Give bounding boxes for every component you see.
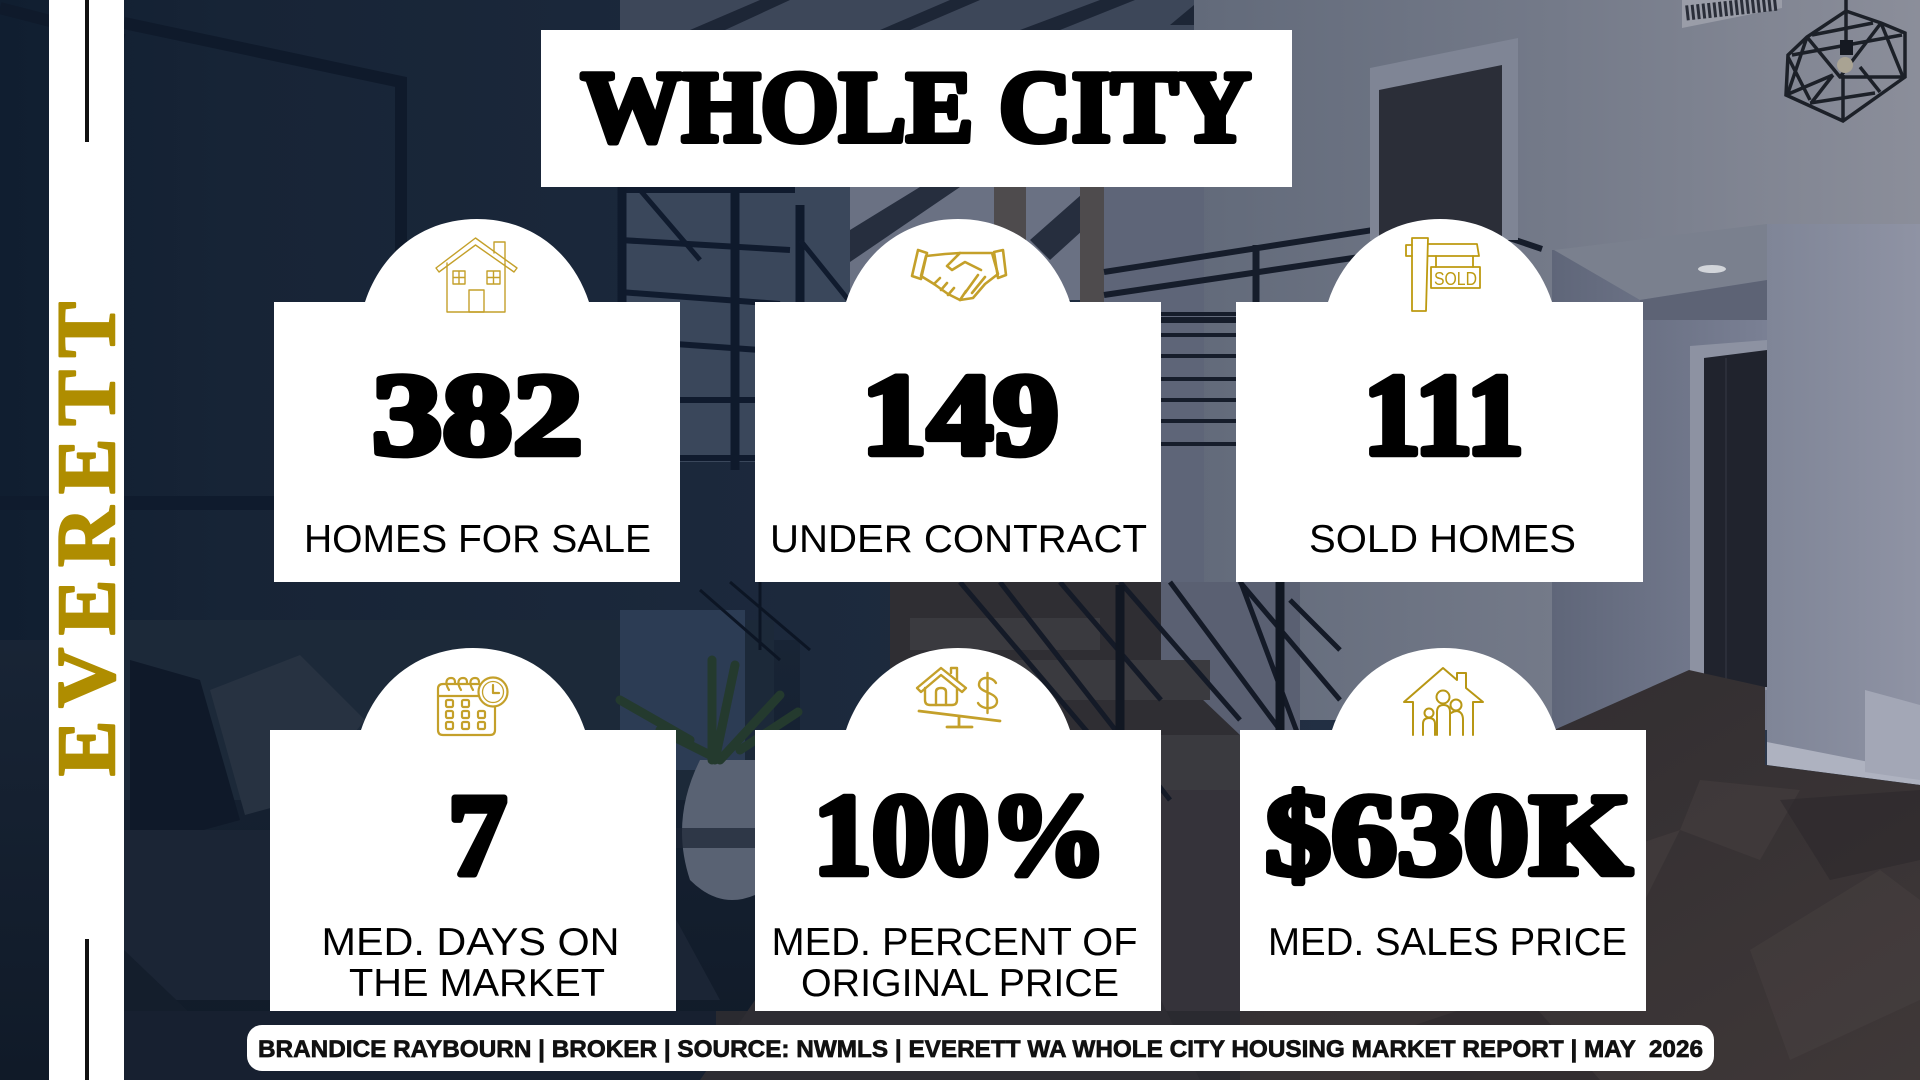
icon: house dollar scale <box>917 668 1000 727</box>
number: 100% <box>813 771 1107 900</box>
floor <box>1240 670 1920 1080</box>
icon: family in house <box>1404 668 1483 735</box>
right column wall <box>1767 224 1920 764</box>
label: MED. DAYS ON <box>322 921 620 964</box>
icon: house <box>436 238 517 312</box>
number: 382 <box>372 351 583 480</box>
card: under contract <box>755 219 1161 582</box>
label: MED. PERCENT OF <box>772 921 1138 964</box>
sidebar city name: EVERETT <box>40 302 132 776</box>
card: sold homes <box>1236 219 1643 582</box>
label: SOLD HOMES <box>1309 518 1576 561</box>
sidebar bottom rule <box>85 939 89 1080</box>
title: WHOLE CITY <box>581 51 1251 164</box>
icon text: SOLD <box>1434 269 1477 289</box>
footer credit bar: BRANDICE RAYBOURN | BROKER | SOURCE: NWMLS | EVERETT WA WHOLE CITY HOUSING MARKET REPORT | MAY 2026 <box>258 1036 1703 1063</box>
label second line: THE MARKET <box>349 962 605 1005</box>
number: $630K <box>1265 771 1632 900</box>
pendant lamp <box>1786 0 1905 121</box>
soffit and hall <box>1552 250 1767 730</box>
left sidebar <box>40 0 132 1080</box>
number: 111 <box>1363 351 1524 480</box>
icon: sold sign <box>1406 238 1480 311</box>
vent <box>1682 0 1782 28</box>
footer credit bar <box>247 1025 1714 1071</box>
card: median sales price <box>1240 648 1646 1011</box>
card: median percent of original price <box>755 648 1161 1011</box>
upper door <box>1370 38 1518 240</box>
ceiling & beams <box>620 0 1194 187</box>
number: 149 <box>861 351 1059 480</box>
number: 7 <box>448 771 507 900</box>
icon: handshake <box>912 250 1006 300</box>
label: MED. SALES PRICE <box>1268 921 1627 964</box>
card: median days on market <box>270 648 676 1011</box>
label: HOMES FOR SALE <box>304 518 651 561</box>
label second line: ORIGINAL PRICE <box>801 962 1119 1005</box>
upstairs wall <box>1194 0 1920 720</box>
railing window area <box>620 187 850 462</box>
icon: calendar and clock <box>438 678 508 735</box>
card: homes for sale <box>274 219 680 582</box>
label: UNDER CONTRACT <box>770 518 1147 561</box>
sidebar top rule <box>85 0 89 142</box>
lower door <box>1690 340 1767 690</box>
staircase <box>890 582 1240 1080</box>
title <box>541 30 1292 187</box>
sofa, pillows, vase, plant <box>124 620 774 800</box>
stair railing bars <box>1104 218 1542 320</box>
bottom table / rug <box>124 1011 744 1080</box>
